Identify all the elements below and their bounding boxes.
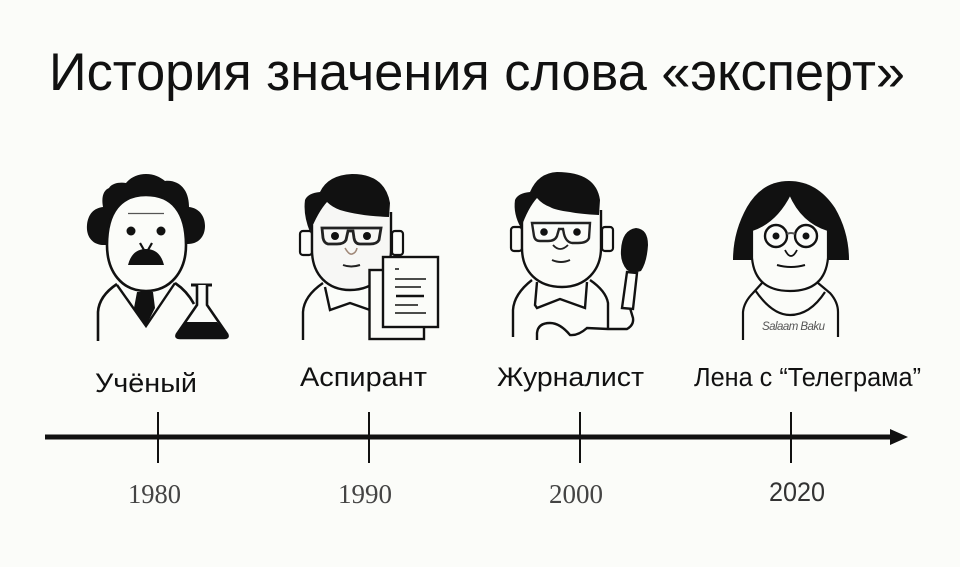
timeline arrow (45, 412, 908, 463)
document lines (395, 269, 426, 313)
year 1990: 1990 (338, 479, 392, 509)
title: История значения слова «эксперт» (49, 43, 905, 102)
label: Lena from Telegram: Лена с “Телеграма” (694, 364, 921, 392)
icon: journalist (511, 172, 648, 340)
label: scientist: Учёный (95, 368, 197, 398)
icon: scientist (87, 174, 228, 341)
label: journalist: Журналист (497, 362, 644, 392)
microphone (622, 272, 637, 309)
label: graduate student: Аспирант (300, 362, 427, 392)
icon: graduate student (300, 174, 438, 340)
icon: Lena: Salaam Baku (762, 321, 826, 333)
year 2000: 2000 (549, 479, 603, 509)
icon: Lena (733, 181, 849, 340)
year 1980: 1980 (128, 479, 181, 509)
year 2020: 2020 (769, 477, 825, 507)
